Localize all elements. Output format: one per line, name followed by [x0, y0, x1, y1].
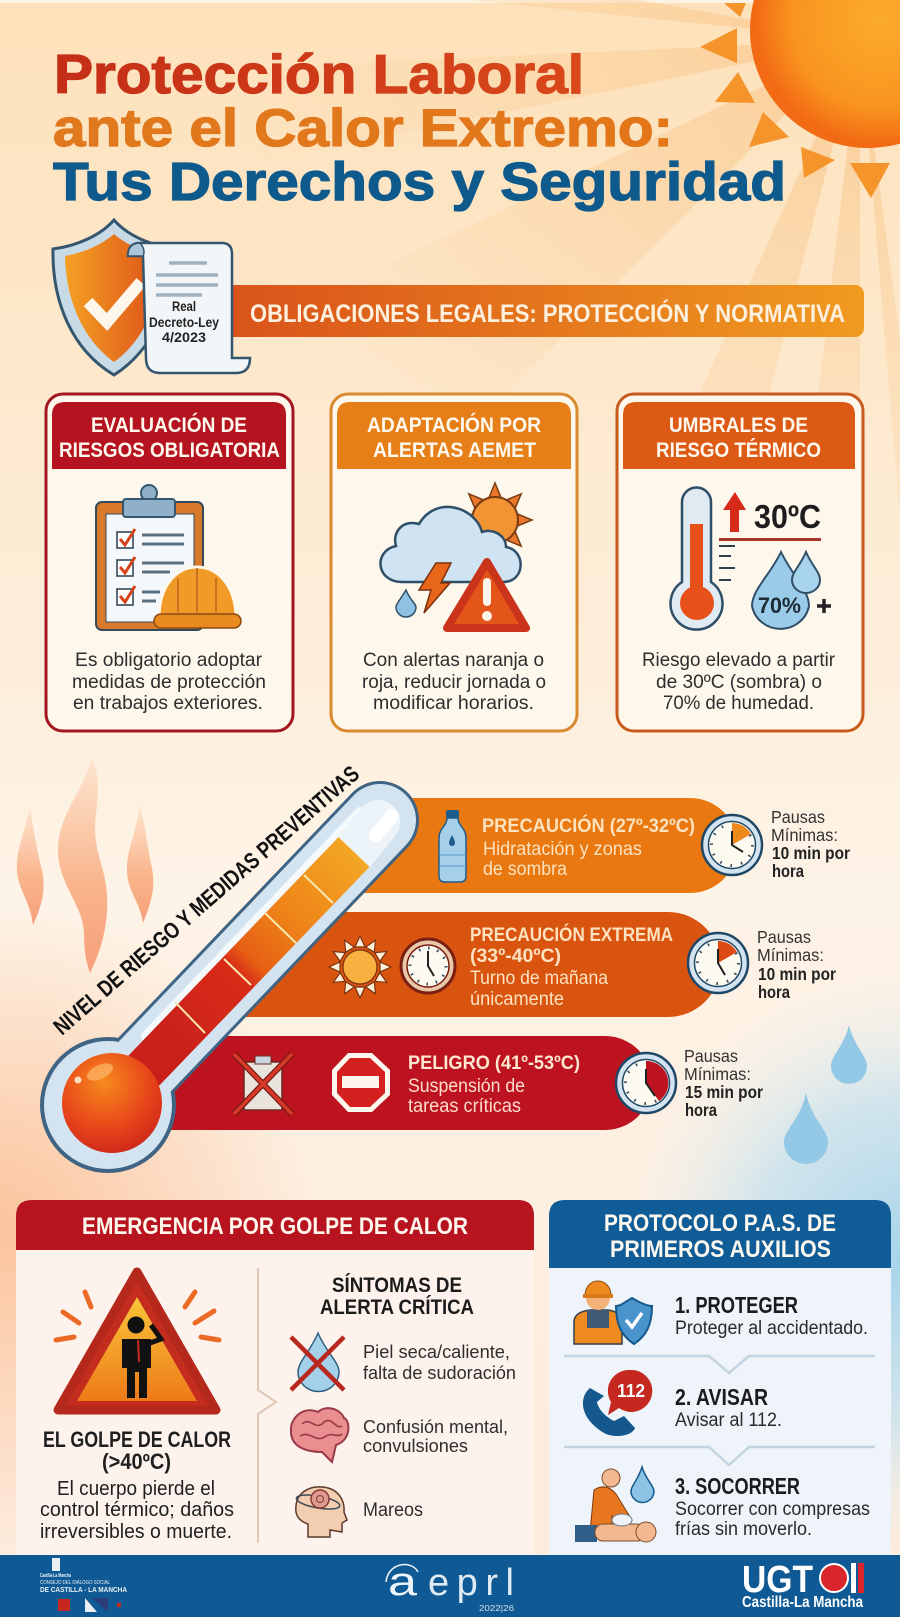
- pausas text: Pausas: [771, 807, 825, 827]
- thermometer: [40, 812, 392, 1173]
- text: [470, 924, 673, 1010]
- logo: consejo diálogo social: DE CASTILLA - LA MANCHA: [40, 1587, 127, 1594]
- heading: PRIMEROS AUXILIOS: [610, 1236, 831, 1263]
- body text: Riesgo elevado a partir: [642, 650, 836, 671]
- logo: UGT Castilla-La Mancha: UGT: [742, 1559, 813, 1601]
- heat stroke text: El cuerpo pierde el: [57, 1478, 215, 1500]
- text: (33º-40ºC): [470, 946, 561, 967]
- panel: umbrales de riesgo: [617, 394, 863, 731]
- heading: PROTOCOLO P.A.S. DE: [604, 1210, 836, 1237]
- pausas text: 15 min por: [685, 1082, 763, 1102]
- heading: RIESGOS OBLIGATORIA: [59, 439, 280, 462]
- heat stroke text: control térmico; daños: [40, 1499, 234, 1521]
- document label: [149, 299, 219, 345]
- icon: clock 10 min: [702, 815, 762, 875]
- risk level: peligro: [170, 1036, 763, 1130]
- body text: medidas de protección: [72, 672, 266, 693]
- pausas text: [684, 1046, 763, 1120]
- text: 2. AVISAR: [675, 1384, 768, 1410]
- heading: [604, 1210, 836, 1263]
- text: [675, 1473, 870, 1540]
- icon: storm and warning: [380, 483, 532, 628]
- logo: consejo diálogo social: Castilla-La Mancha: [40, 1573, 71, 1579]
- pausas text: hora: [685, 1100, 717, 1120]
- icon: water drops: [784, 1025, 867, 1164]
- divider arrow 2: [564, 1447, 875, 1465]
- symptom: dry skin: falta de sudoración: [363, 1362, 516, 1383]
- document label: Decreto-Ley: [149, 315, 219, 330]
- text: [675, 1292, 868, 1339]
- symptom: dizziness: [295, 1487, 423, 1537]
- body text: 70% de humedad.: [663, 693, 814, 714]
- body text: de 30ºC (sombra) o: [656, 672, 822, 693]
- symptoms heading: ALERTA CRÍTICA: [320, 1296, 474, 1319]
- text: [408, 1053, 580, 1117]
- icon: thermometer, 30ºC and humidity: 70%: [758, 593, 801, 618]
- pausas text: Pausas: [757, 927, 811, 947]
- text: PRECAUCIÓN (27º-32ºC): [482, 815, 695, 837]
- heat stroke text: EL GOLPE DE CALOR: [43, 1427, 231, 1452]
- icon: clock 10 min: [688, 933, 748, 993]
- logo: aeprl: a: [388, 1560, 418, 1604]
- icon: phone 112: 112: [617, 1381, 645, 1401]
- section banner: obligaciones legales: [215, 285, 864, 337]
- heading: [367, 413, 541, 462]
- icon: thermometer, 30ºC and humidity: [670, 488, 831, 630]
- divider arrow 1: [564, 1356, 875, 1373]
- logo: aeprl: 2022|26: [479, 1603, 514, 1613]
- pausas text: Mínimas:: [757, 945, 824, 965]
- body text: roja, reducir jornada o: [362, 672, 546, 693]
- icon: clipboard and helmet: [96, 485, 241, 630]
- icon: water bottle: [439, 810, 466, 882]
- symptoms heading: SÍNTOMAS DE: [332, 1274, 462, 1297]
- logo: aeprl: eprl: [428, 1562, 514, 1604]
- heading: [656, 414, 821, 462]
- text: de sombra: [483, 859, 567, 880]
- heading: UMBRALES DE: [669, 414, 808, 437]
- pausas text: Mínimas:: [771, 825, 838, 845]
- icon: clock 15 min: [616, 1053, 676, 1113]
- symptom: confusion: Confusión mental,: [363, 1416, 508, 1437]
- decoration: heat flames: [17, 757, 153, 973]
- panel: emergencia por golpe de calor: [16, 1200, 534, 1555]
- logo: consejo diálogo social: [40, 1558, 127, 1612]
- step 2: avisar: [583, 1370, 782, 1436]
- icon: morning clock: [401, 939, 455, 993]
- text: Proteger al accidentado.: [675, 1318, 868, 1339]
- pausas text: 10 min por: [772, 843, 850, 863]
- logo: UGT Castilla-La Mancha: Castilla-La Mancha: [742, 1594, 863, 1611]
- text: Hidratación y zonas: [483, 839, 642, 860]
- text: tareas críticas: [408, 1096, 521, 1117]
- panel: adaptación por alertas: [331, 394, 577, 731]
- title: [53, 43, 786, 212]
- risk level: precaución extrema: [205, 912, 836, 1017]
- pausas text: Pausas: [684, 1046, 738, 1066]
- heat stroke text: (>40ºC): [102, 1449, 171, 1474]
- footer: [0, 1555, 900, 1617]
- heading: EMERGENCIA POR GOLPE DE CALOR: [82, 1213, 468, 1240]
- icon: phone 112: [583, 1370, 652, 1436]
- risk level: precaución: [325, 798, 850, 893]
- heading: EVALUACIÓN DE: [91, 413, 247, 437]
- document label: Real: [172, 299, 196, 314]
- text: Socorrer con compresas: [675, 1499, 870, 1520]
- icon: rescuer with compress: [575, 1467, 656, 1542]
- symptom: dry skin: [291, 1333, 516, 1391]
- pausas text: [757, 927, 836, 1002]
- step 3: socorrer: [575, 1467, 870, 1542]
- symptoms heading: [320, 1274, 474, 1319]
- heading: ADAPTACIÓN POR: [367, 413, 541, 437]
- symptom: confusion: [291, 1408, 508, 1462]
- text: frías sin moverlo.: [675, 1519, 812, 1540]
- heading: RIESGO TÉRMICO: [656, 439, 821, 462]
- text: PELIGRO (41º-53ºC): [408, 1053, 580, 1074]
- body text: Es obligatorio adoptar: [75, 650, 263, 671]
- text: 3. SOCORRER: [675, 1473, 800, 1499]
- symptom: confusion: convulsiones: [363, 1435, 468, 1456]
- logo: UGT Castilla-La Mancha: [742, 1559, 864, 1611]
- text: [482, 815, 695, 880]
- icon: stop sign: [332, 1053, 390, 1112]
- symptom: dry skin: Piel seca/caliente,: [363, 1341, 510, 1362]
- heading: [59, 413, 280, 462]
- text: PRECAUCIÓN EXTREMA: [470, 924, 673, 946]
- pausas text: hora: [772, 861, 804, 881]
- text: [675, 1384, 782, 1431]
- icon: shield and decree document: [53, 220, 250, 375]
- body text: modificar horarios.: [373, 693, 534, 714]
- panel: evaluación de riesgos: [46, 394, 293, 731]
- pausas text: Mínimas:: [684, 1064, 751, 1084]
- logo: consejo diálogo social: CONSEJO DEL DIÁLOGO SOCIAL: [40, 1579, 110, 1586]
- document label: 4/2023: [162, 330, 207, 345]
- text: únicamente: [470, 989, 564, 1010]
- icon: worker with shield: [574, 1281, 652, 1344]
- body text: [642, 650, 836, 714]
- body text: en trabajos exteriores.: [73, 693, 263, 714]
- pausas text: 10 min por: [758, 964, 836, 984]
- title: Tus Derechos y Seguridad: [53, 152, 786, 212]
- title: Protección Laboral: [54, 43, 584, 105]
- text: Suspensión de: [408, 1076, 525, 1097]
- heat stroke text: [40, 1427, 234, 1543]
- pausas text: [771, 807, 850, 881]
- icon: heat stroke warning: [56, 1272, 219, 1410]
- text: Turno de mañana: [470, 968, 608, 989]
- pausas text: hora: [758, 982, 790, 1002]
- text: 1. PROTEGER: [675, 1292, 798, 1318]
- thermometer label: NIVEL DE RIESGO Y MEDIDAS PREVENTIVAS: [48, 760, 364, 1040]
- logo: aeprl: [386, 1560, 514, 1613]
- symptom: dizziness: Mareos: [363, 1500, 423, 1521]
- step 1: proteger: [574, 1281, 868, 1344]
- title: ante el Calor Extremo:: [53, 99, 673, 158]
- body text: [362, 650, 546, 714]
- panel: protocolo P.A.S.: [549, 1200, 891, 1555]
- heading: ALERTAS AEMET: [373, 439, 536, 462]
- icon: crossed clipboard: [234, 1054, 292, 1114]
- divider arrow: [258, 1268, 276, 1543]
- body text: [72, 650, 266, 714]
- icon: thermometer, 30ºC and humidity: 30ºC: [754, 498, 821, 535]
- text: Avisar al 112.: [675, 1410, 782, 1431]
- icon: sun: [329, 936, 391, 998]
- icon: sun: [700, 0, 900, 198]
- body text: Con alertas naranja o: [363, 650, 544, 671]
- heat stroke text: irreversibles o muerte.: [40, 1521, 232, 1543]
